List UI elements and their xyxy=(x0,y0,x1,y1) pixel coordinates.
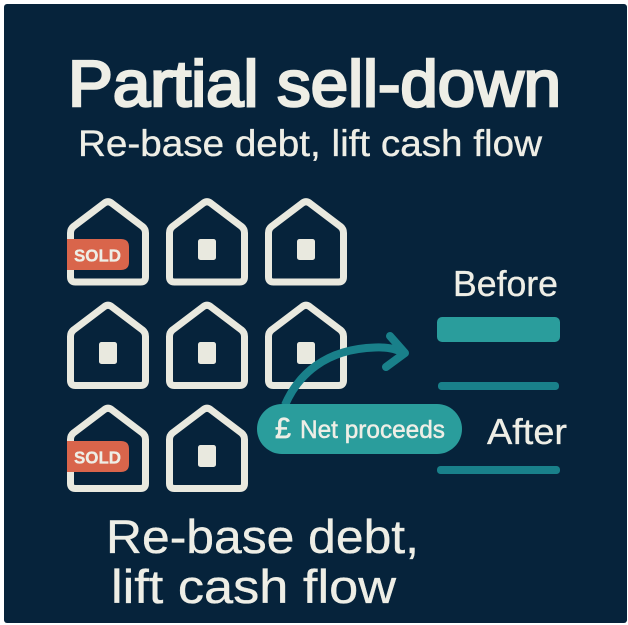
after thin bar xyxy=(437,466,560,474)
subtitle: Re-base debt, lift cash flow xyxy=(78,123,542,164)
house: row 1 column 1, sold xyxy=(67,202,146,282)
after label: After xyxy=(487,411,567,452)
house: row 1 column 2 xyxy=(170,202,244,282)
house: row 2 column 3 xyxy=(268,305,344,386)
net proceeds pill: Net proceeds xyxy=(300,416,445,444)
sold badge: SOLD xyxy=(74,448,121,468)
house: row 2 column 2 xyxy=(170,305,244,386)
house: row 1 column 3 xyxy=(268,202,344,282)
title: Partial sell-down xyxy=(68,47,561,120)
bottom caption: lift cash flow xyxy=(111,560,397,613)
sold badge: SOLD xyxy=(74,246,121,266)
house grid xyxy=(67,202,344,488)
house: row 3 column 2 xyxy=(170,408,244,488)
house: row 2 column 1 xyxy=(70,305,146,386)
before label: Before xyxy=(453,263,558,304)
before thin bar xyxy=(438,382,559,390)
net proceeds pill: £ xyxy=(275,413,291,445)
bottom caption: Re-base debt, xyxy=(106,510,419,563)
net proceeds pill xyxy=(257,404,462,454)
before equity bar xyxy=(437,317,560,342)
house: row 3 column 1, sold xyxy=(67,408,146,488)
bottom caption xyxy=(106,510,419,613)
arrow: proceeds to debt xyxy=(285,336,405,405)
